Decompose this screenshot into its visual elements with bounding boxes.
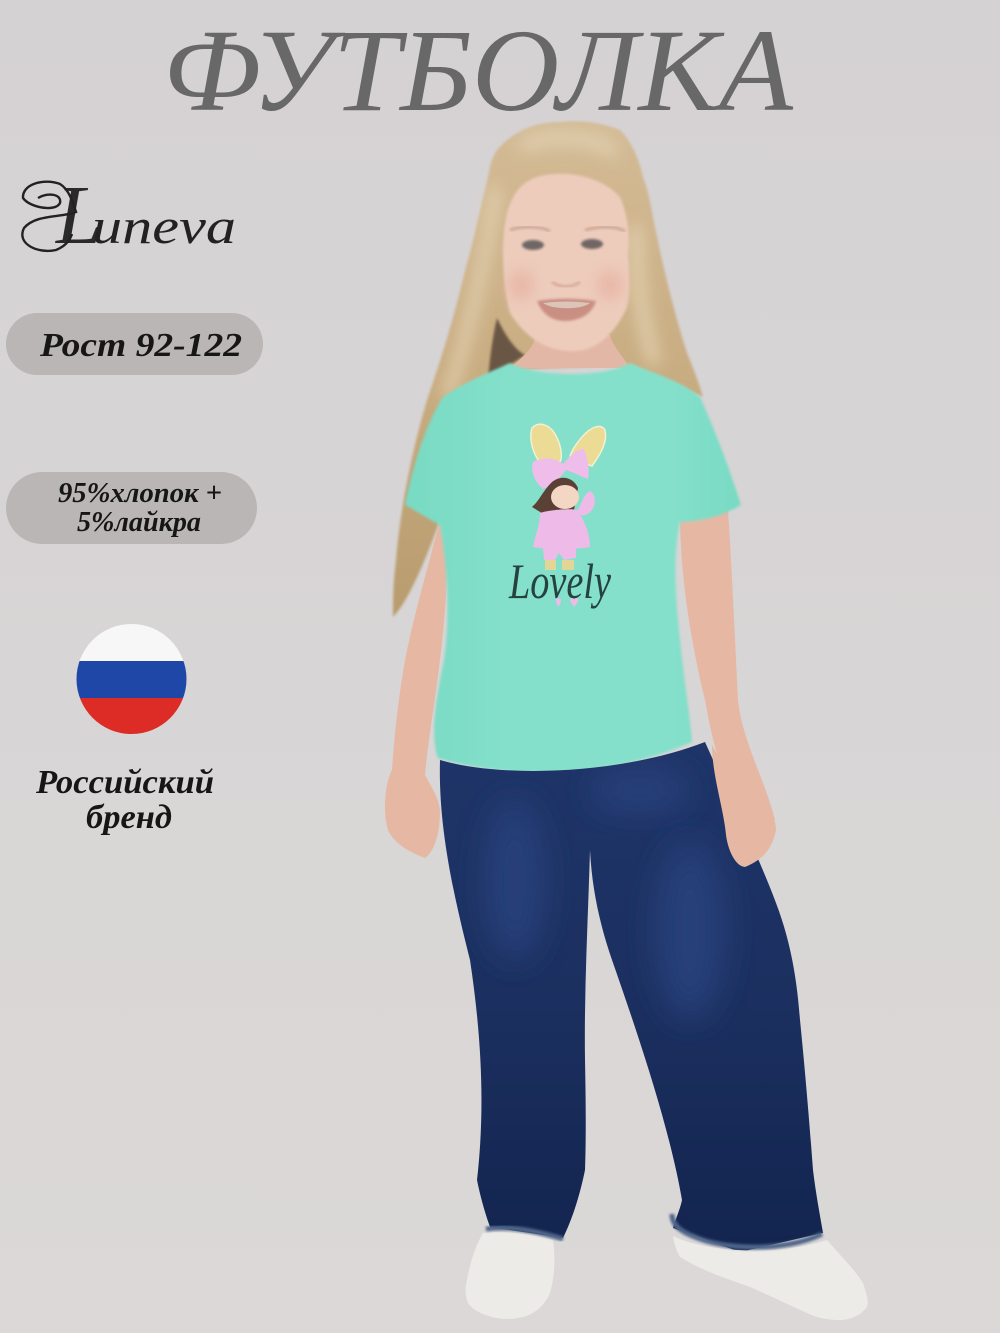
brand logo: L xyxy=(55,169,103,262)
title: ФУТБОЛКА xyxy=(163,5,794,136)
hair back xyxy=(393,121,703,617)
right jeans hem fringe xyxy=(672,1214,822,1247)
neck xyxy=(510,335,630,368)
Russian brand label: бренд xyxy=(86,799,172,836)
composition badge: 95%хлопок + xyxy=(58,478,222,509)
t-shirt xyxy=(405,363,741,772)
print: doll face xyxy=(551,485,579,509)
print: doll dress xyxy=(533,491,595,549)
height badge: Рост 92-122 xyxy=(39,327,242,364)
right hand xyxy=(712,745,776,867)
Russian brand label xyxy=(35,764,214,836)
photo: girl xyxy=(385,121,868,1320)
cheek blush xyxy=(509,270,622,300)
print: doll trousers and boots xyxy=(543,547,576,560)
brand logo: uneva xyxy=(92,198,236,254)
composition badge: 5%лайкра xyxy=(77,507,201,538)
print: bow xyxy=(532,449,589,489)
jeans xyxy=(430,735,830,1255)
right shoe xyxy=(673,1236,868,1320)
icon: Russian flag xyxy=(76,624,187,735)
right upper arm xyxy=(680,510,775,820)
dark under-hair xyxy=(488,318,525,380)
left shoe xyxy=(466,1232,554,1319)
hair highlights xyxy=(448,138,654,395)
t-shirt print xyxy=(508,424,612,609)
print: Lovely lettering: Lovely xyxy=(508,553,612,609)
print: hearts xyxy=(555,598,561,607)
height badge xyxy=(6,313,263,375)
facial features xyxy=(510,227,625,321)
face xyxy=(503,174,629,351)
composition badge xyxy=(6,472,257,544)
print: bunny ears xyxy=(531,424,561,462)
print: doll hair xyxy=(532,478,578,515)
left jeans hem fringe xyxy=(486,1228,563,1239)
Russian brand label: Российский xyxy=(35,764,214,801)
brand logo xyxy=(22,169,236,262)
left arm xyxy=(385,520,447,858)
